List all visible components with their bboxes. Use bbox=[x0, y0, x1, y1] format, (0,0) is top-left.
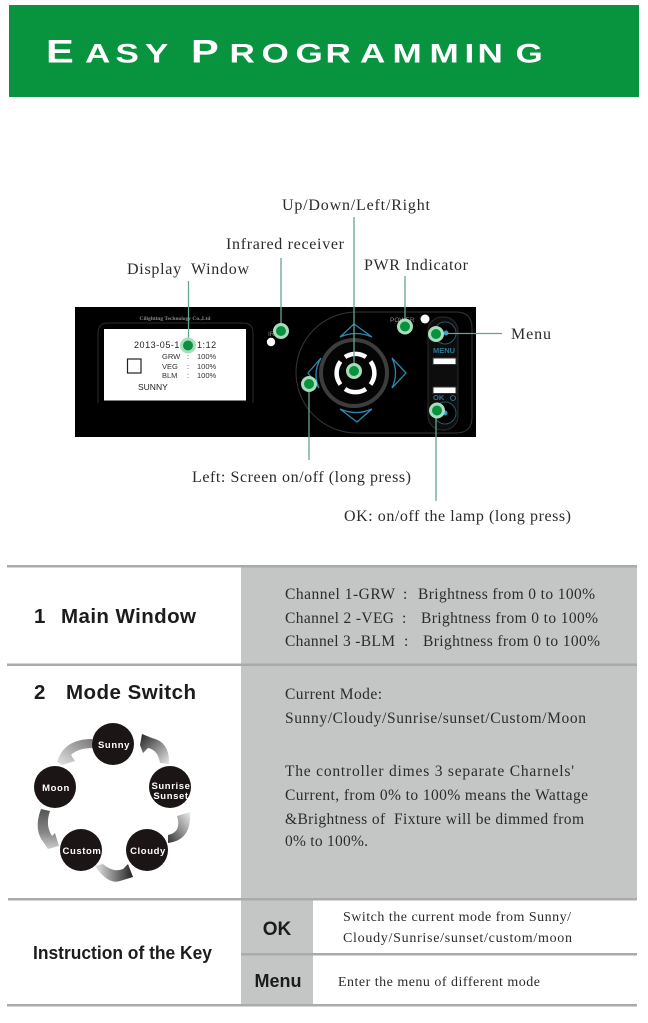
title: E bbox=[46, 33, 74, 69]
key label: OK: OK bbox=[263, 919, 292, 940]
section 1 channel text bbox=[285, 586, 600, 650]
section 2 description text: Current, from 0% to 100% means the Wattage bbox=[285, 787, 588, 804]
callout: Menu bbox=[430, 326, 551, 343]
section 1 channel text: Brightness from 0 to 100% bbox=[418, 586, 595, 603]
display screen: : bbox=[187, 362, 189, 371]
arrow: sunrise to sunny bbox=[140, 734, 169, 764]
key description: OK bbox=[343, 910, 572, 946]
display screen: 100% bbox=[197, 371, 217, 380]
callout: Menu: Menu bbox=[511, 326, 551, 343]
node: Moon: Moon bbox=[42, 783, 70, 794]
node: Sunrise Sunset: Sunset bbox=[153, 791, 189, 802]
mode cycle diagram bbox=[34, 723, 191, 882]
arrow: cloudy to sunrise bbox=[168, 812, 190, 843]
brand text: Cilighting Technology Co.,Ltd bbox=[140, 316, 210, 322]
menu and OK key group: MENU bbox=[433, 346, 455, 355]
section 1 channel text: : bbox=[402, 610, 406, 627]
title: P bbox=[191, 33, 219, 69]
callout: PWR Indicator: PWR Indicator bbox=[364, 257, 469, 274]
infrared label and LED: IR bbox=[268, 331, 275, 338]
title: ASY bbox=[85, 38, 168, 68]
callout: Left screen on/off: Left: Screen on/off (long press) bbox=[192, 469, 411, 486]
callout: Display Window: Display Window bbox=[127, 261, 249, 278]
section 1: Main Window heading: Main Window bbox=[61, 605, 196, 628]
gray table column bbox=[241, 566, 637, 899]
infrared label and LED bbox=[267, 331, 275, 346]
key label: Menu: Menu bbox=[254, 971, 302, 991]
section 1 channel text: Channel 3 -BLM bbox=[285, 633, 395, 650]
display screen: 1:12 bbox=[197, 340, 217, 350]
section 2 description text: 0% to 100%. bbox=[285, 833, 368, 850]
section 2 description text: Sunny/Cloudy/Sunrise/sunset/Custom/Moon bbox=[285, 710, 586, 727]
section 1 channel text: Channel 2 -VEG bbox=[285, 610, 394, 627]
display screen: : bbox=[187, 352, 189, 361]
section 1: Main Window heading: 1 bbox=[34, 605, 45, 628]
node: Sunny: Sunny bbox=[98, 740, 130, 751]
control surround outline bbox=[296, 312, 472, 433]
section 2: Mode Switch heading: 2 bbox=[34, 681, 45, 704]
title: ROGRAMMING bbox=[229, 38, 543, 68]
node: Sunny bbox=[92, 723, 134, 765]
node: Cloudy bbox=[126, 829, 168, 871]
callout: Display Window bbox=[127, 261, 249, 352]
key description: Menu: Enter the menu of different mode bbox=[338, 975, 540, 990]
controller panel bbox=[75, 307, 476, 437]
callout: OK on/off the lamp: OK: on/off the lamp (long press) bbox=[344, 508, 571, 525]
display screen: 100% bbox=[197, 362, 217, 371]
section 3: Instruction of the Key heading: Instruction of the Key bbox=[33, 942, 213, 963]
title banner bbox=[9, 5, 639, 97]
node: Moon bbox=[34, 766, 76, 808]
menu and OK key group bbox=[428, 317, 458, 430]
node: Custom: Custom bbox=[63, 846, 101, 857]
section 2: Mode Switch heading: Mode Switch bbox=[66, 681, 196, 704]
arrow: moon to custom bbox=[38, 809, 59, 849]
section 2 description text bbox=[285, 686, 588, 850]
callout: Infrared receiver: Infrared receiver bbox=[226, 236, 345, 253]
display screen: 100% bbox=[197, 352, 217, 361]
display screen: SUNNY bbox=[138, 382, 168, 392]
node: Sunrise Sunset: Sunrise bbox=[151, 781, 191, 792]
section 1 channel text: : bbox=[404, 633, 408, 650]
display screen: GRW bbox=[162, 352, 181, 361]
arrow: custom to cloudy bbox=[95, 864, 133, 882]
display screen bbox=[104, 329, 246, 400]
power label and LED bbox=[390, 314, 430, 324]
node: Cloudy: Cloudy bbox=[130, 846, 166, 857]
callout: Left screen on/off bbox=[192, 378, 411, 486]
direction pad bbox=[308, 324, 406, 422]
key description: OK: Switch the current mode from Sunny/ bbox=[343, 910, 571, 925]
display screen: BLM bbox=[162, 371, 177, 380]
callout: Infrared receiver bbox=[226, 236, 345, 338]
power label and LED: POWER bbox=[390, 317, 415, 324]
section 2 description text: &Brightness of Fixture will be dimmed from bbox=[285, 811, 584, 828]
arrow: sunny to moon bbox=[57, 739, 93, 765]
node: Sunrise Sunset bbox=[149, 766, 191, 808]
display screen: 2013-05-13 bbox=[134, 340, 186, 350]
section 2 description text: The controller dimes 3 separate Charnels' bbox=[285, 763, 574, 780]
section 1 channel text: Channel 1-GRW bbox=[285, 586, 395, 603]
callout: Up/Down/Left/Right: Up/Down/Left/Right bbox=[282, 197, 431, 214]
node: Custom bbox=[60, 829, 102, 871]
callout: Up/Down/Left/Right bbox=[282, 197, 431, 378]
section 1 channel text: Brightness from 0 to 100% bbox=[421, 610, 598, 627]
section 1 channel text: Brightness from 0 to 100% bbox=[423, 633, 600, 650]
menu and OK key group: OK bbox=[433, 393, 445, 402]
callout: PWR Indicator bbox=[364, 257, 469, 333]
display screen: VEG bbox=[162, 362, 178, 371]
section 2 description text: Current Mode: bbox=[285, 686, 382, 703]
callout: OK on/off the lamp bbox=[344, 404, 571, 525]
key description: OK: Cloudy/Sunrise/sunset/custom/moon bbox=[343, 931, 572, 946]
section 1 channel text: : bbox=[403, 586, 407, 603]
display screen: : bbox=[187, 371, 189, 380]
